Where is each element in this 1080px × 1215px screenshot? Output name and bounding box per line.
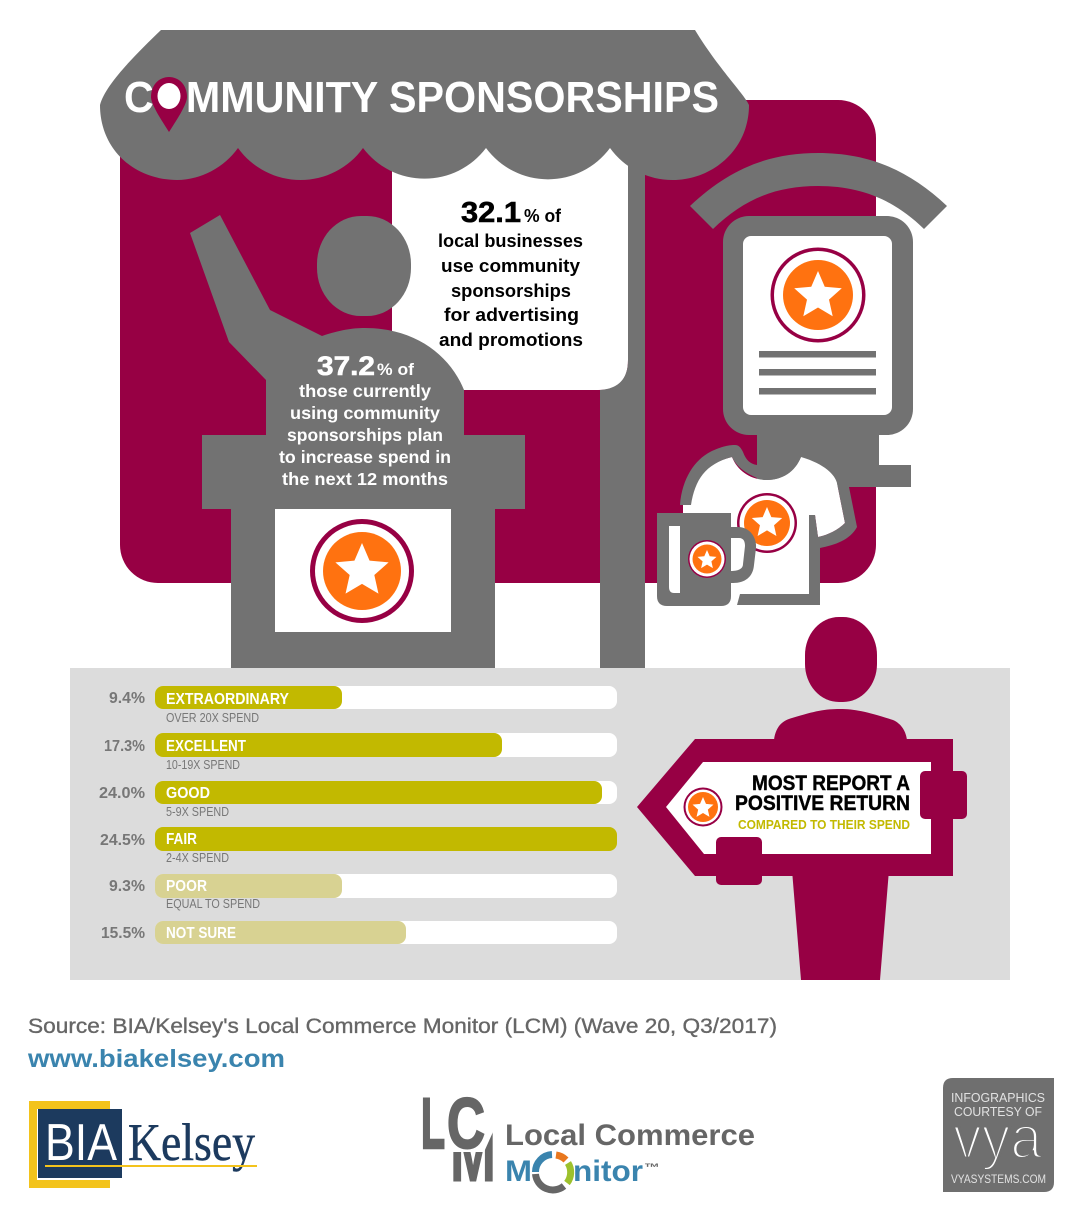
- panel: white stat board: [392, 140, 645, 668]
- bar: extraordinary: 9.4%: [109, 690, 145, 707]
- bar: fair: 2-4X SPEND: [166, 850, 229, 865]
- shirt body: [683, 457, 845, 594]
- sign text: COMPARED TO THEIR SPEND: [738, 818, 910, 832]
- stat text: 32.1%: for advertising: [444, 305, 579, 325]
- logo: VYA: [943, 1078, 1054, 1192]
- bar: extraordinary: EXTRAORDINARY: [166, 691, 290, 708]
- podium sign: [275, 509, 451, 632]
- icon: map pin: [151, 77, 187, 132]
- shirt right outline: [737, 483, 857, 605]
- billboard arc: [690, 153, 947, 229]
- panel: storefront background: [120, 100, 876, 583]
- shoulders and body: [774, 709, 907, 980]
- logo: Local Commerce Monitor: M: [450, 1109, 496, 1198]
- billboard frame: [723, 216, 913, 435]
- logo: Local Commerce Monitor: L: [421, 1085, 445, 1164]
- bar: poor: EQUAL TO SPEND: [166, 896, 260, 911]
- logo: VYA: VYASYSTEMS.COM: [951, 1172, 1046, 1186]
- logo: BIA Kelsey: Kelsey: [128, 1114, 255, 1172]
- stat text: 32.1%: 32.1: [461, 197, 521, 229]
- logo: Local Commerce Monitor: [421, 1085, 755, 1198]
- logo: Local Commerce Monitor: ™: [644, 1162, 660, 1174]
- logo: VYA: INFOGRAPHICS: [951, 1090, 1045, 1105]
- bar: excellent: EXCELLENT: [166, 738, 246, 755]
- shirt left outline: [680, 445, 757, 505]
- board pole: [600, 150, 645, 668]
- person holding arrow sign: [637, 617, 967, 980]
- logo: Local Commerce Monitor: Local Commerce: [505, 1119, 755, 1152]
- bar: good: 5-9X SPEND: [166, 804, 229, 819]
- bar: extraordinary: OVER 20X SPEND: [166, 710, 259, 725]
- logo: BIA Kelsey: [29, 1101, 257, 1188]
- sign text: POSITIVE RETURN: [735, 792, 910, 815]
- icon: coffee mug: [657, 513, 756, 606]
- stat text: 37.2%: [279, 351, 451, 489]
- bar chart: reported return: [99, 686, 617, 944]
- bar: excellent: 17.3%: [104, 738, 145, 755]
- icon: shirt star badge: [737, 493, 797, 553]
- stat text: 32.1%: % of: [524, 206, 562, 226]
- logo: BIA Kelsey: BIA: [45, 1114, 117, 1172]
- billboard text lines: [759, 351, 876, 394]
- bar: fair: FAIR: [166, 831, 197, 848]
- panel: return on spend: [70, 668, 1010, 980]
- body and raised arm: [190, 215, 464, 440]
- icon: star badge: [684, 788, 722, 826]
- stat text: 37.2%: sponsorships plan: [287, 425, 443, 445]
- stat text: 37.2%: the next 12 months: [282, 469, 448, 489]
- logo: Local Commerce Monitor: M: [505, 1155, 532, 1188]
- stat text: 37.2%: using community: [290, 403, 440, 423]
- bar: not sure: 15.5%: [101, 925, 145, 942]
- bar: fair: 24.5%: [100, 832, 145, 849]
- sign text: MOST REPORT A: [752, 772, 910, 795]
- stat text: 37.2%: % of: [377, 360, 414, 379]
- right hand: [920, 771, 967, 819]
- icon: star badge: [770, 248, 866, 342]
- bar: not sure: [101, 921, 617, 944]
- bar: fair: [100, 827, 617, 865]
- source line: Source: BIA/Kelsey's Local Commerce Monitor (LCM) (Wave 20, Q3/2017): [28, 1015, 777, 1038]
- arrow sign frame: [637, 739, 953, 876]
- billboard screen: [743, 236, 892, 415]
- awning with title: [100, 30, 749, 180]
- stat text: 37.2%: to increase spend in: [279, 447, 451, 467]
- bar: good: [99, 781, 617, 819]
- billboard post: [757, 425, 911, 487]
- logo: Local Commerce Monitor: nitor: [573, 1155, 643, 1188]
- bar: not sure: NOT SURE: [166, 925, 236, 942]
- logo: Local Commerce Monitor: C: [447, 1085, 485, 1164]
- bar: excellent: [104, 733, 617, 772]
- stat text: 32.1%: [438, 197, 583, 350]
- stat text: 32.1%: local businesses: [438, 231, 583, 251]
- website link: www.biakelsey.com: [27, 1045, 285, 1073]
- head: [805, 617, 877, 702]
- stat text: 37.2%: those currently: [299, 381, 431, 401]
- left hand: [716, 837, 762, 885]
- collar: [757, 440, 801, 480]
- presenter at podium: [190, 215, 525, 668]
- bar: good: GOOD: [166, 785, 210, 802]
- podium: [202, 435, 525, 668]
- title: COMMUNITY SPONSORSHIPS: [124, 73, 719, 122]
- stat text: 32.1%: and promotions: [439, 330, 583, 350]
- icon: mug star badge: [688, 540, 726, 578]
- billboard: [690, 153, 947, 487]
- logo: VYA: vya: [953, 1104, 1043, 1171]
- logo: VYA: COURTESY OF: [954, 1104, 1042, 1119]
- stat text: 32.1%: use community: [441, 256, 580, 276]
- bar: extraordinary: [109, 686, 617, 725]
- sign text: [735, 772, 910, 832]
- icon: star badge: [310, 519, 414, 623]
- icon: t-shirt: [680, 440, 857, 605]
- bar: poor: [109, 874, 617, 911]
- stat text: 32.1%: sponsorships: [451, 281, 571, 301]
- bar: poor: 9.3%: [109, 878, 145, 895]
- bar: excellent: 10-19X SPEND: [166, 757, 240, 772]
- stat text: 37.2%: 37.2: [317, 351, 375, 381]
- bar: poor: POOR: [166, 878, 207, 895]
- bar: good: 24.0%: [99, 785, 145, 802]
- icon: ring: [535, 1154, 571, 1190]
- head: [317, 216, 411, 316]
- arrow sign face: [666, 762, 931, 854]
